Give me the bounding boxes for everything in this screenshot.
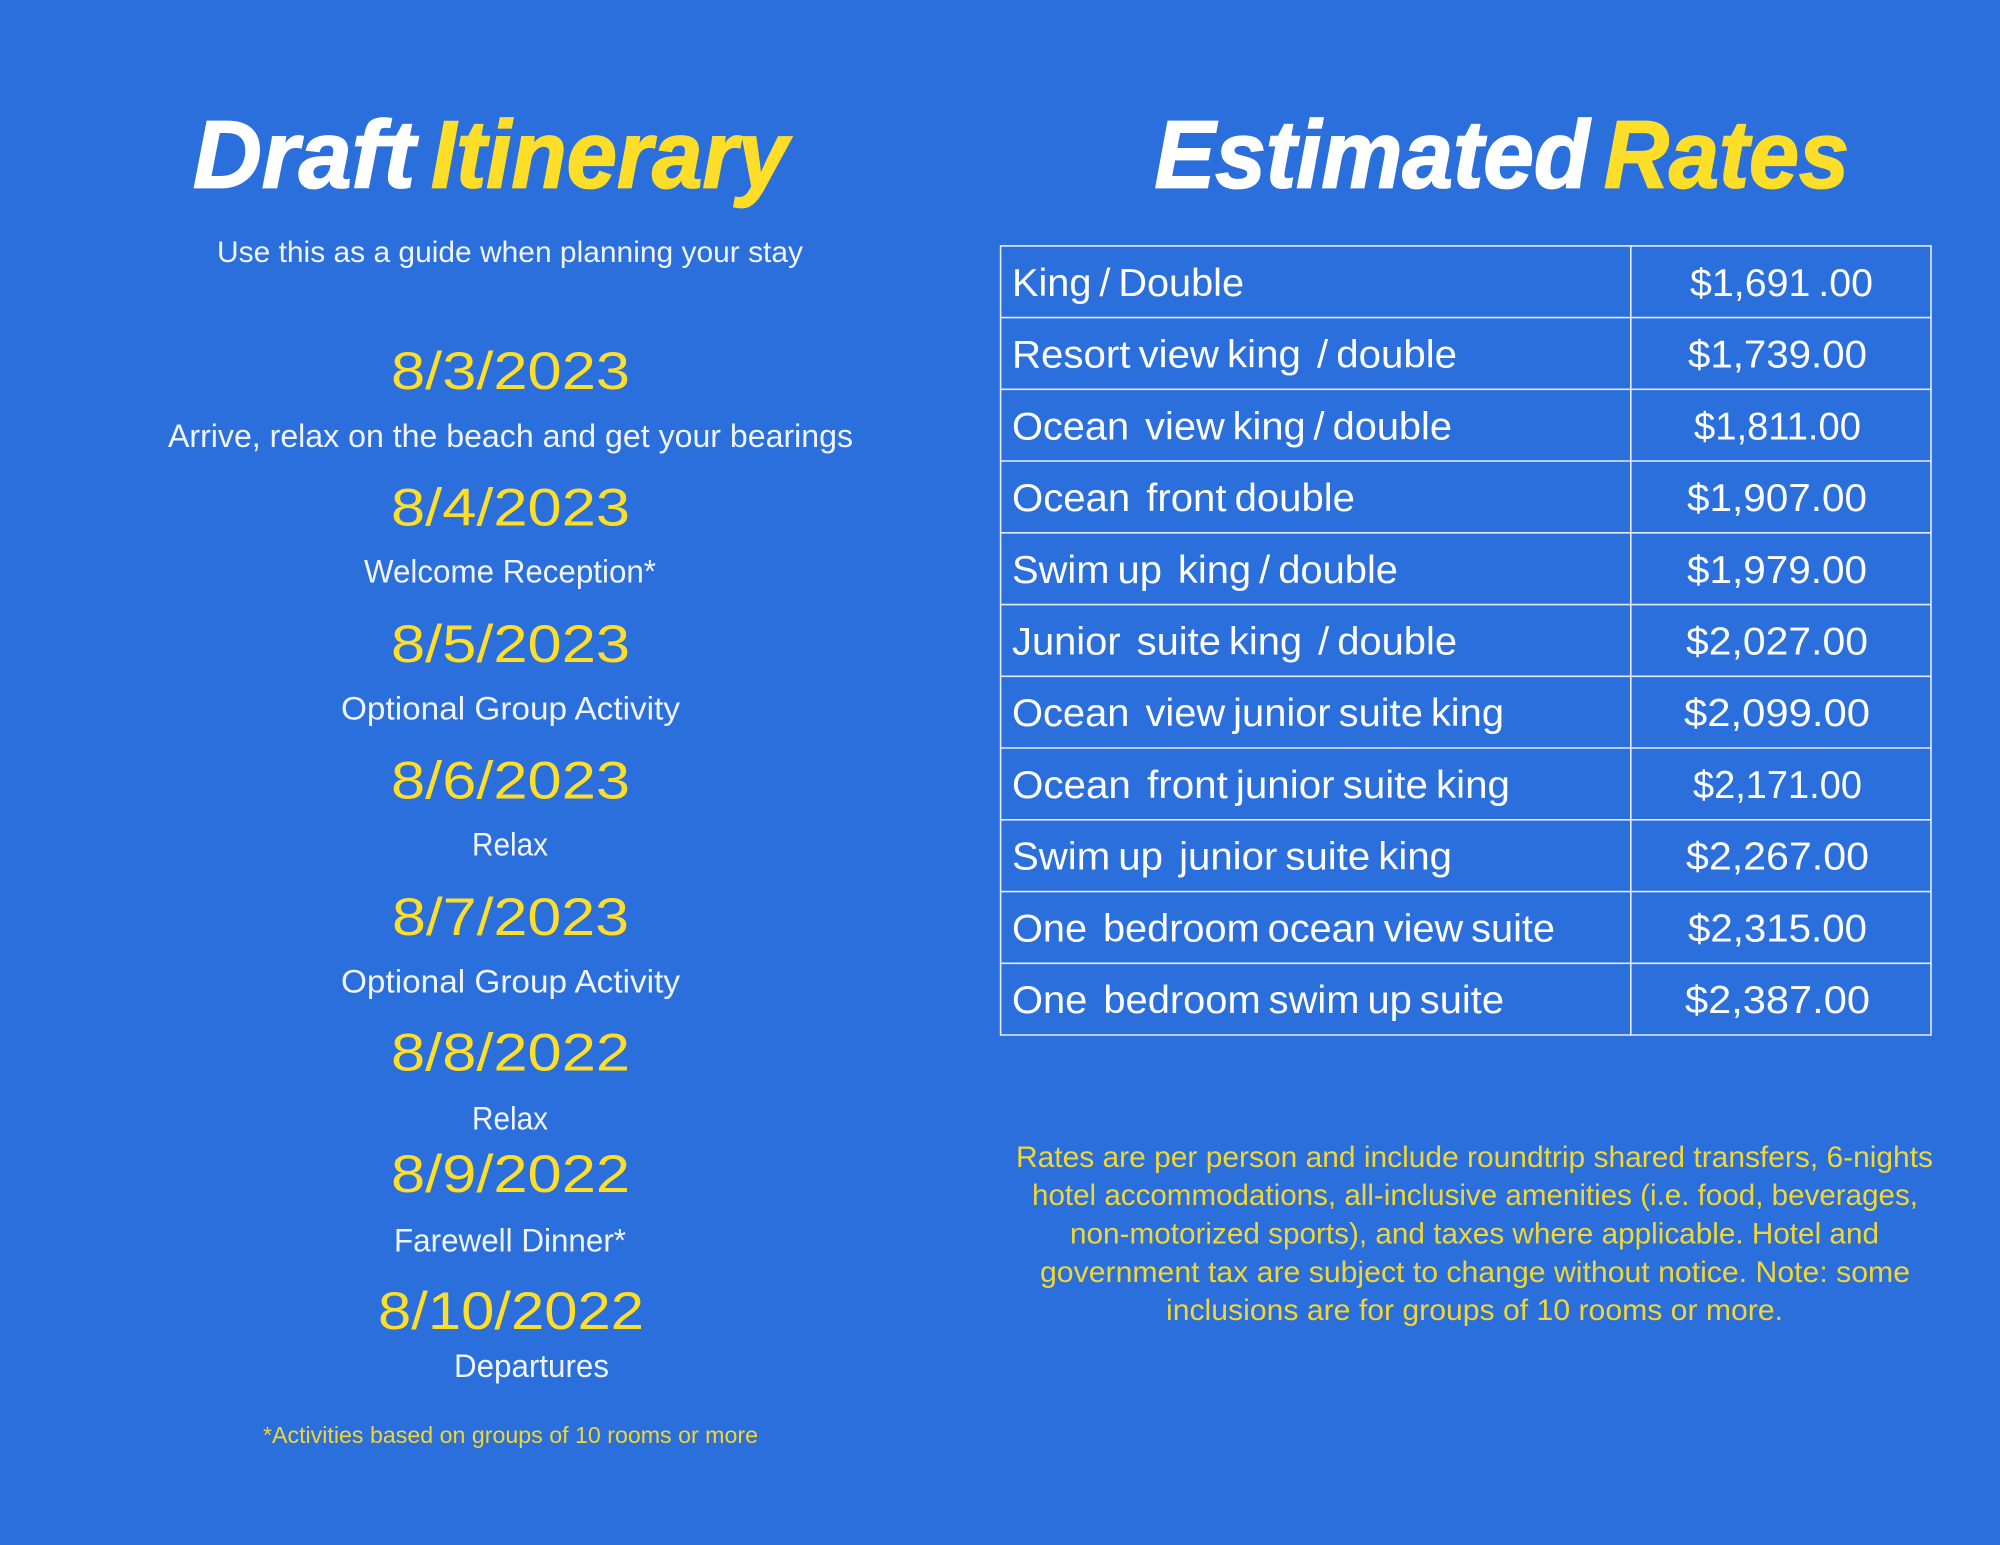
day: 8/7/2023: Optional Group Activity	[341, 964, 680, 1000]
day: 8/7/2023: 8/7/2023	[392, 888, 629, 947]
day: 8/8/2022: 8/8/2022	[391, 1024, 630, 1082]
row: One bedroom ocean view suite: One bedroom ocean view suite	[1012, 907, 1555, 950]
row: Ocean front double: Ocean front double	[1012, 477, 1355, 520]
title: Draft Itinerary	[193, 102, 792, 208]
day: 8/6/2023: 8/6/2023	[391, 752, 630, 810]
row: Resort view king / double	[1012, 334, 1867, 377]
day: 8/4/2023	[364, 479, 656, 590]
day: 8/5/2023: Optional Group Activity	[341, 690, 680, 726]
row: Resort view king / double: $1,739.00	[1688, 334, 1867, 377]
day: 8/10/2022: Departures	[454, 1348, 609, 1384]
title: Estimated Rates: Rates	[1604, 102, 1849, 208]
day: 8/7/2023	[341, 888, 680, 1000]
row: Ocean view junior suite king: Ocean view junior suite king	[1012, 692, 1504, 735]
row: Ocean view junior suite king	[1012, 692, 1870, 735]
day: 8/9/2022: Farewell Dinner*	[394, 1222, 626, 1258]
title: Draft Itinerary: Itinerary	[431, 102, 792, 208]
day: 8/9/2022	[391, 1145, 630, 1258]
title: Draft Itinerary: Draft	[193, 102, 419, 208]
row: Ocean front junior suite king: Ocean front junior suite king	[1012, 764, 1510, 807]
itinerary list	[168, 342, 853, 1384]
row: King / Double: $1,691 .00	[1690, 262, 1873, 305]
row: One bedroom swim up suite: One bedroom swim up suite	[1012, 979, 1504, 1022]
day: 8/8/2022: Relax	[472, 1100, 548, 1136]
day: 8/9/2022: 8/9/2022	[391, 1145, 630, 1204]
row: Junior suite king / double	[1012, 620, 1868, 664]
row: Junior suite king / double: $2,027.00	[1686, 620, 1868, 664]
row: Swim up junior suite king: Swim up junior suite king	[1012, 836, 1452, 879]
day: 8/5/2023: 8/5/2023	[391, 615, 630, 674]
rates note: government tax are subject to change without notice. Note: some	[1040, 1256, 1910, 1289]
row: One bedroom swim up suite: $2,387.00	[1685, 979, 1870, 1022]
day: 8/4/2023: 8/4/2023	[391, 479, 630, 538]
subtitle: Use this as a guide when planning your stay	[217, 236, 803, 269]
rates note: Rates are per person and include roundtrip shared transfers, 6-nights	[1016, 1141, 1933, 1174]
day: 8/3/2023: Arrive, relax on the beach and get your bearings	[168, 418, 853, 454]
day: 8/10/2022: 8/10/2022	[378, 1282, 644, 1341]
rates note	[1016, 1141, 1933, 1327]
row: Ocean front double	[1012, 477, 1867, 520]
title: Estimated Rates	[1154, 102, 1849, 208]
day: 8/8/2022	[391, 1024, 630, 1136]
row: Ocean view king / double: Ocean view king / double	[1012, 405, 1452, 448]
row: King / Double	[1012, 262, 1873, 305]
row: Ocean view king / double: $1,811.00	[1694, 405, 1861, 448]
row: Ocean front junior suite king	[1012, 764, 1862, 807]
day: 8/3/2023	[168, 342, 853, 454]
day: 8/4/2023: Welcome Reception*	[364, 554, 656, 590]
day: 8/3/2023: 8/3/2023	[391, 342, 630, 401]
rates note: inclusions are for groups of 10 rooms or more.	[1166, 1294, 1783, 1327]
row: Swim up king / double: $1,979.00	[1687, 549, 1867, 592]
row: Ocean front junior suite king: $2,171.00	[1693, 764, 1862, 807]
row: One bedroom ocean view suite: $2,315.00	[1688, 907, 1867, 950]
row: Junior suite king / double: Junior suite king / double	[1012, 620, 1457, 664]
row: Swim up junior suite king: $2,267.00	[1686, 836, 1869, 879]
row: Ocean view junior suite king: $2,099.00	[1684, 692, 1870, 735]
row: Ocean front double: $1,907.00	[1687, 477, 1867, 520]
row: Resort view king / double: Resort view king / double	[1012, 334, 1457, 377]
day: 8/10/2022	[378, 1282, 644, 1384]
row: Swim up junior suite king	[1012, 836, 1869, 879]
row: Swim up king / double: Swim up king / double	[1012, 549, 1398, 592]
day: 8/6/2023: Relax	[472, 826, 548, 862]
title: Estimated Rates: Estimated	[1154, 102, 1592, 208]
row: One bedroom ocean view suite	[1012, 907, 1867, 950]
row: King / Double: King / Double	[1012, 262, 1244, 305]
day: 8/6/2023	[391, 752, 630, 862]
rates note: hotel accommodations, all-inclusive amenities (i.e. food, beverages,	[1032, 1179, 1918, 1212]
rates table	[1001, 245, 1931, 1036]
day: 8/5/2023	[341, 615, 680, 726]
row: Ocean view king / double	[1012, 405, 1861, 448]
rates note: non-motorized sports), and taxes where applicable. Hotel and	[1070, 1218, 1879, 1250]
row: One bedroom swim up suite	[1012, 979, 1870, 1022]
footnote: *Activities based on groups of 10 rooms or more	[263, 1422, 758, 1448]
row: Swim up king / double	[1012, 549, 1867, 592]
